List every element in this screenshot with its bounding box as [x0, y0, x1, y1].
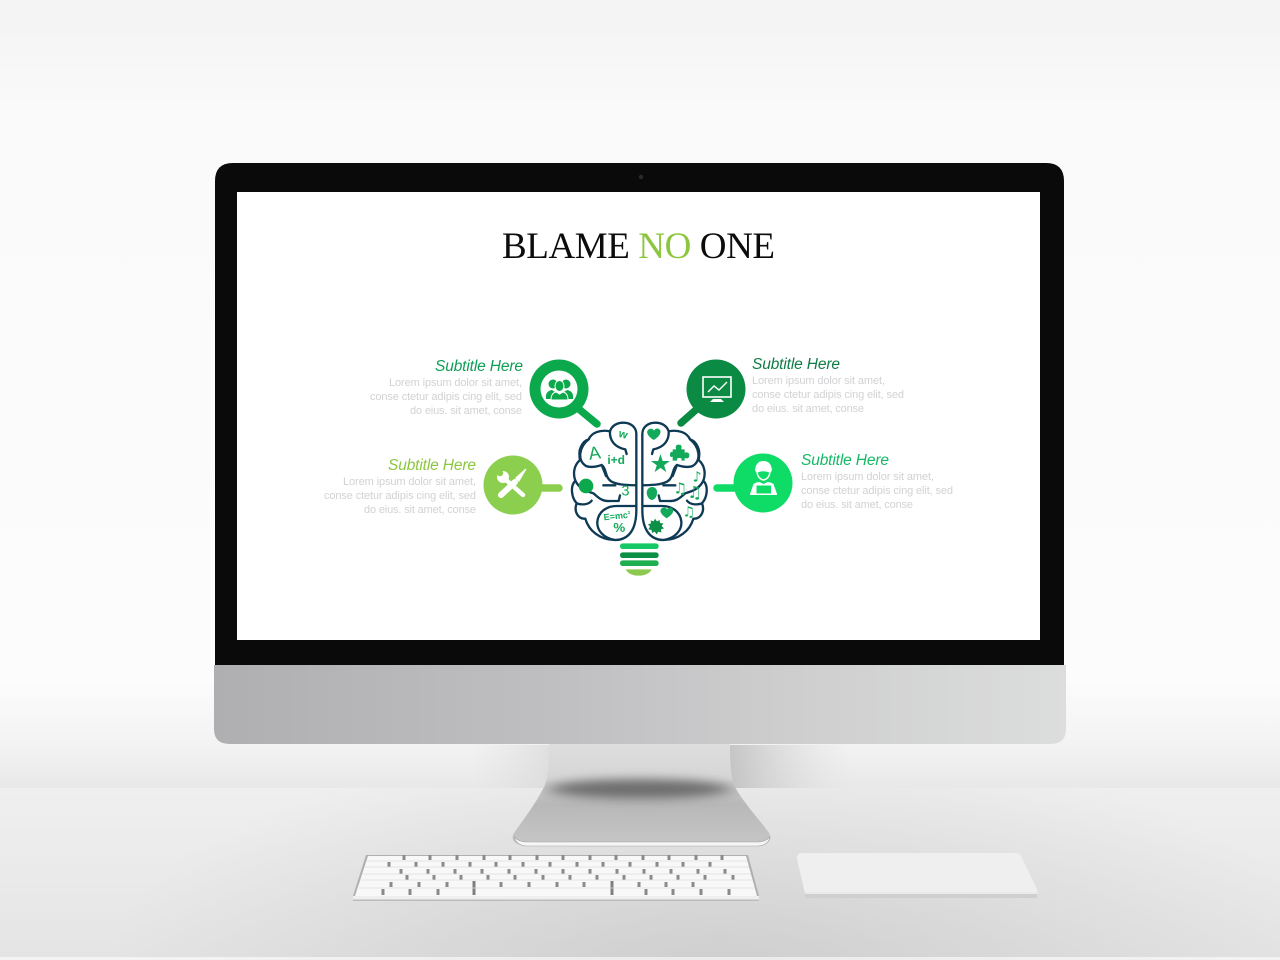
text block: left: do eius. sit amet, conse — [364, 504, 476, 516]
monitor chin — [214, 665, 1066, 744]
magnifier circle — [530, 360, 588, 418]
keyboard — [353, 855, 759, 901]
right hemisphere symbols: ♫ — [683, 505, 695, 521]
right hemisphere symbols: ♫ — [673, 479, 687, 497]
text block: left: Lorem ipsum dolor sit amet, — [343, 476, 476, 488]
bulb base bars — [620, 543, 659, 576]
icon: people — [546, 380, 573, 400]
monitor screen panel — [237, 192, 1040, 640]
left hemisphere symbols: % — [613, 520, 625, 535]
inner ring — [540, 370, 578, 408]
left hemisphere symbols: i+d — [607, 453, 625, 467]
keyboard key gaps — [383, 855, 733, 895]
text block: right: do eius. sit amet, conse — [801, 499, 913, 511]
brain light bulb — [572, 423, 707, 576]
text block: left — [324, 457, 476, 516]
text block: top left — [370, 358, 523, 417]
circle — [734, 454, 792, 512]
monitor stand — [513, 743, 770, 846]
left hemisphere symbols: 3 — [627, 510, 631, 515]
text block: top right: Lorem ipsum dolor sit amet, — [752, 375, 885, 387]
callout: top right monitor chart — [681, 360, 746, 423]
icon: chart monitor — [703, 377, 731, 402]
callout: top left people search — [530, 360, 597, 424]
connector — [717, 484, 741, 492]
text block: top left: Subtitle Here — [435, 358, 523, 375]
title: BLAME NO ONE — [502, 226, 775, 267]
text block: right: Subtitle Here — [801, 452, 889, 469]
text block: top left: Lorem ipsum dolor sit amet, — [389, 377, 522, 389]
stand shadow on wall — [470, 745, 853, 788]
monitor bezel — [215, 163, 1064, 665]
right hemisphere symbols: ★ — [649, 449, 671, 478]
text block: right — [801, 452, 953, 511]
left hemisphere symbols: 3 — [621, 483, 629, 499]
callout: left tools — [484, 456, 559, 514]
webcam — [639, 175, 643, 179]
right hemisphere symbols: ♫ — [687, 483, 702, 502]
left hemisphere outline — [572, 423, 636, 540]
left hemisphere symbols — [579, 428, 631, 535]
magnifier circle — [686, 360, 746, 418]
icon: wrench and screwdriver — [497, 469, 526, 495]
text block: left: Subtitle Here — [388, 457, 476, 474]
text block: top right — [752, 356, 904, 415]
magnifier handle — [580, 410, 597, 424]
desk surface — [0, 788, 1280, 960]
text block: right: conse ctetur adipis cing elit, sed — [801, 485, 953, 497]
circle — [484, 456, 542, 514]
text block: right: Lorem ipsum dolor sit amet, — [801, 471, 934, 483]
text block: top right: conse ctetur adipis cing elit, sed — [752, 389, 904, 401]
text block: left: conse ctetur adipis cing elit, sed — [324, 490, 476, 502]
callout: right person with laptop — [717, 454, 792, 512]
text block: top left: do eius. sit amet, conse — [410, 405, 522, 417]
left hemisphere symbols: A — [587, 442, 602, 464]
right hemisphere symbols: ♪ — [693, 469, 702, 485]
left hemisphere symbols: w — [616, 428, 629, 442]
text block: top right: do eius. sit amet, conse — [752, 403, 864, 415]
left hemisphere symbols: E=mc — [603, 510, 628, 522]
connector — [535, 484, 559, 492]
icon: person with laptop — [750, 461, 777, 495]
right hemisphere symbols — [647, 429, 702, 534]
right hemisphere outline — [642, 423, 707, 540]
magnifier handle — [681, 408, 698, 423]
text block: top left: conse ctetur adipis cing elit, sed — [370, 391, 522, 403]
text block: top right: Subtitle Here — [752, 356, 840, 373]
trackpad — [797, 853, 1037, 898]
